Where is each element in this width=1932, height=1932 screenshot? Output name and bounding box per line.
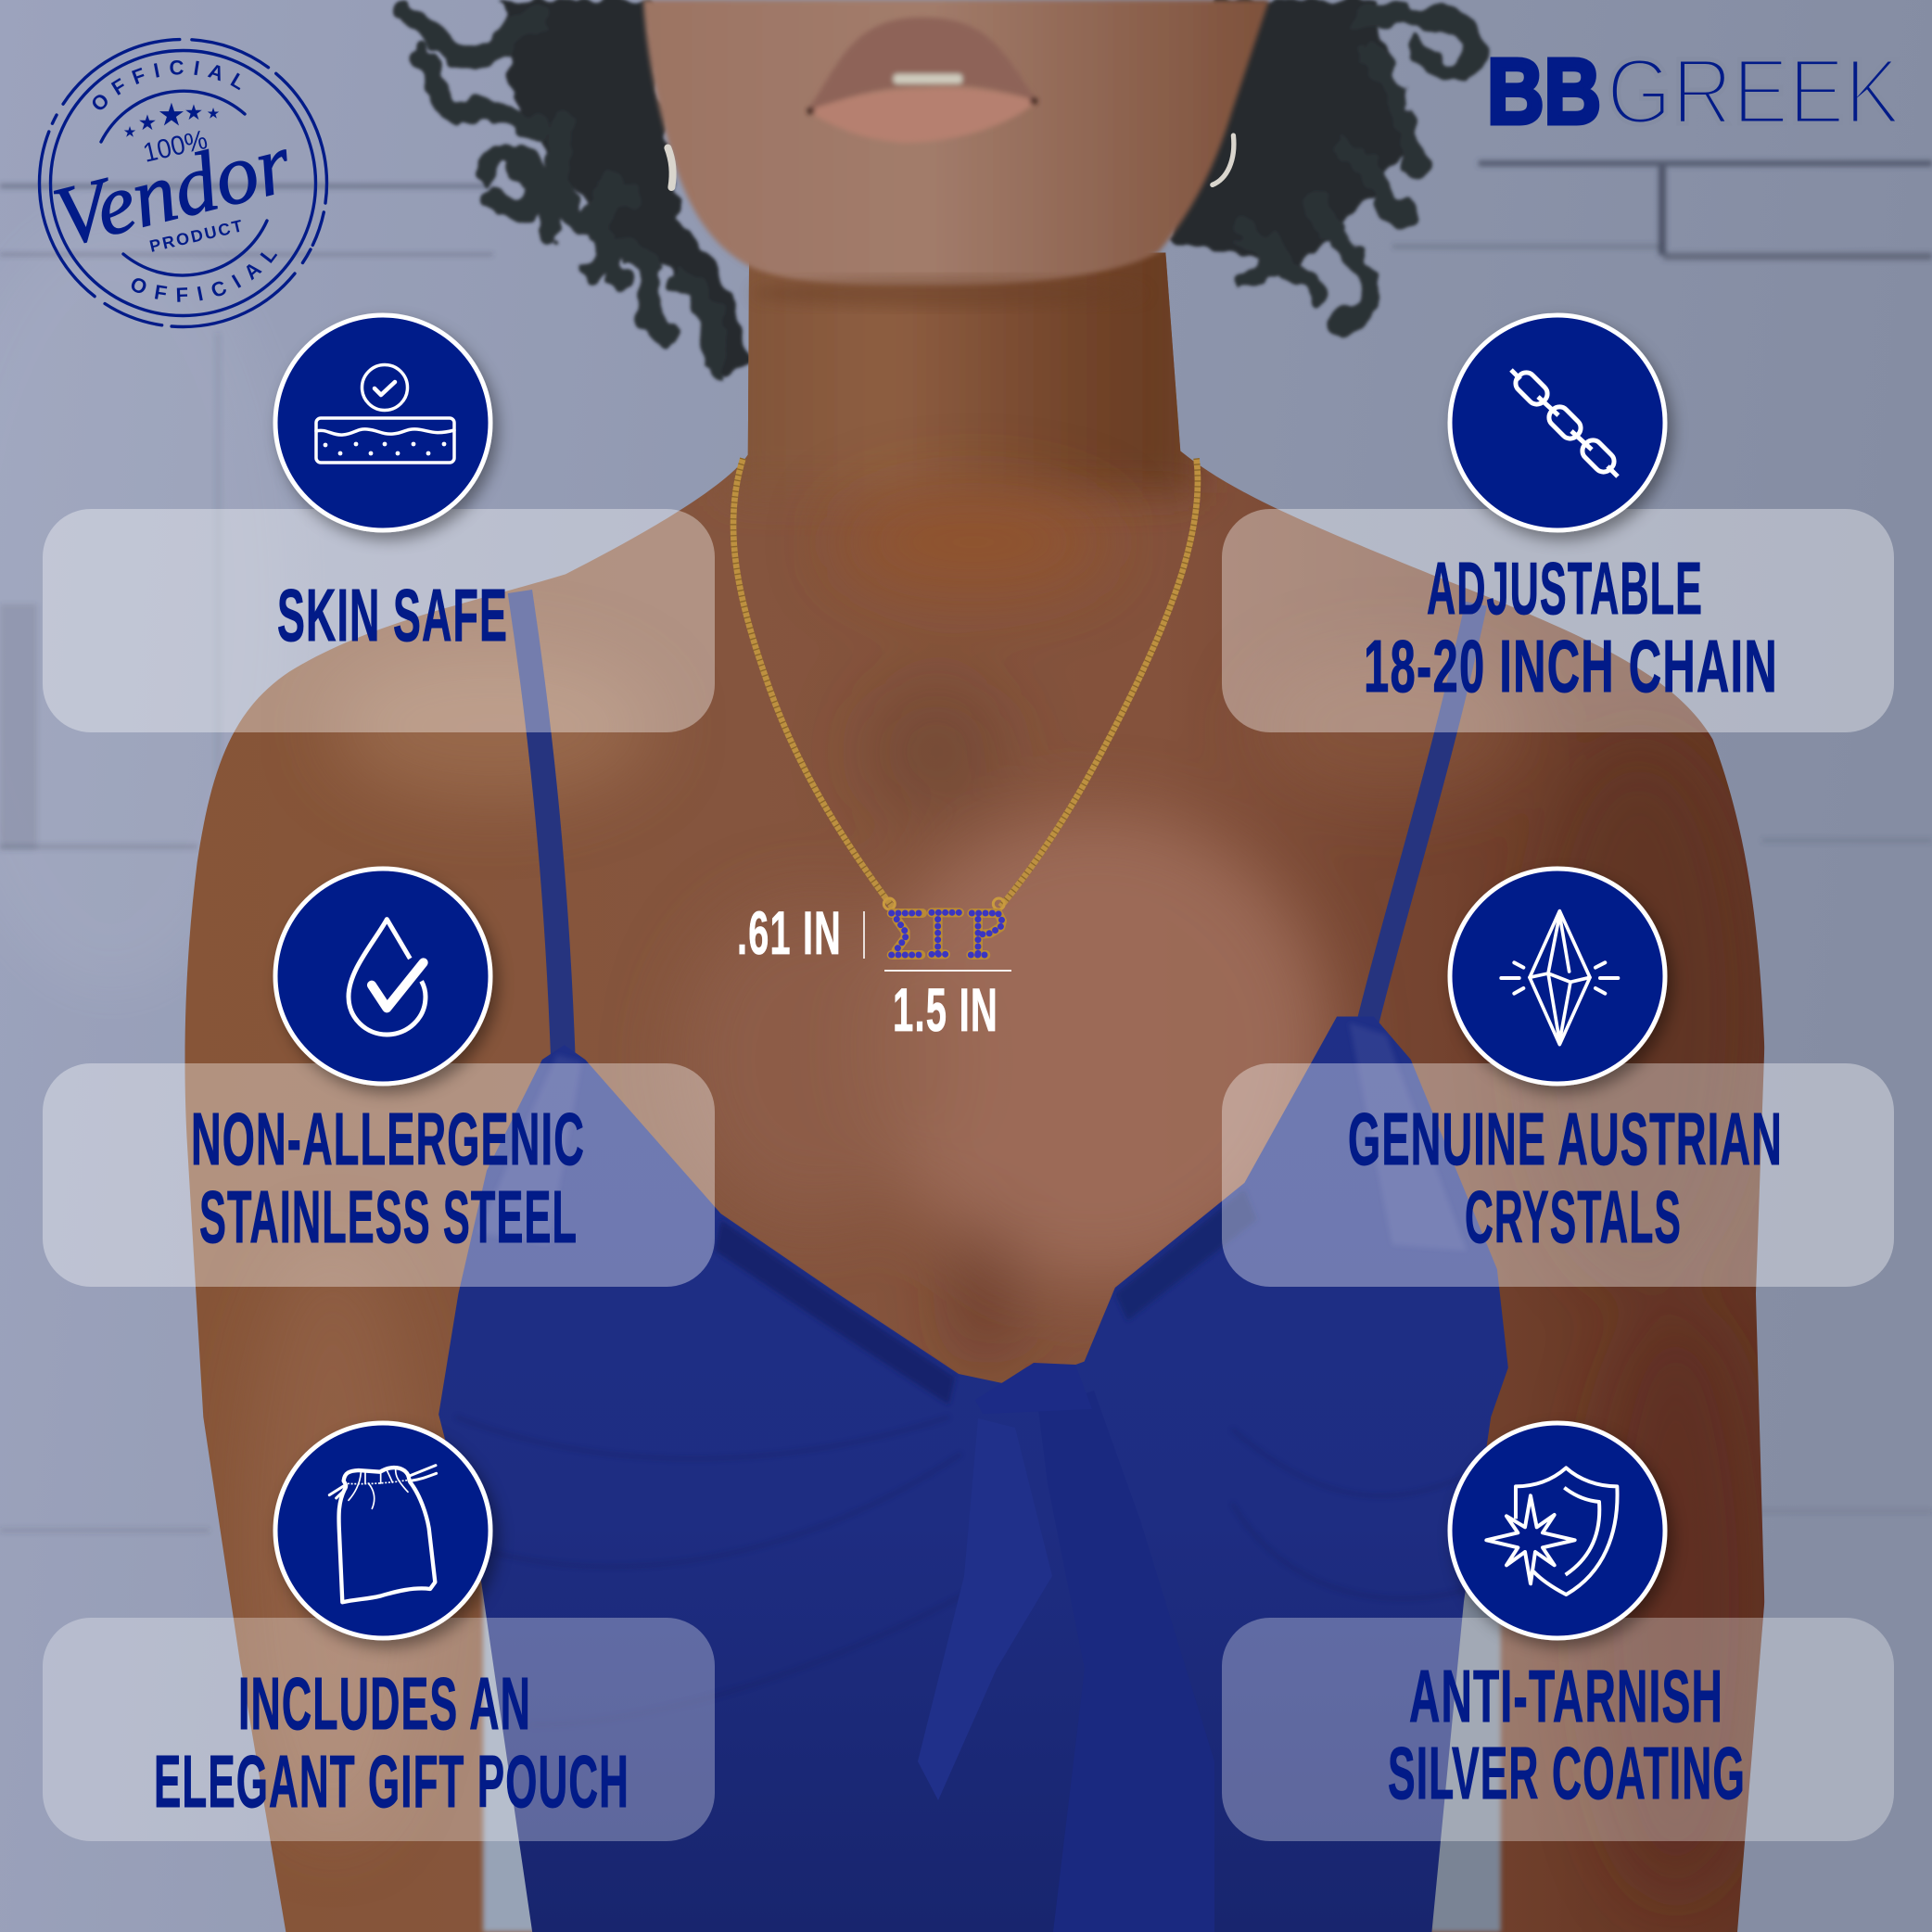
logo: official vendor stamp: 100%: [140, 125, 210, 169]
heading: genuine austrian crystals: [1348, 1098, 1783, 1258]
logo: official vendor stamp: ★: [208, 106, 220, 121]
chin shadow: [752, 278, 1146, 308]
logo: official vendor stamp: ★: [159, 100, 184, 131]
heading: skin safe: SKIN SAFE: [277, 574, 508, 656]
icon: skin safe layers: [275, 315, 490, 530]
logo: BB Greek wordmark: BB: [1487, 40, 1601, 144]
dimension: height label: .61 IN: [737, 898, 842, 967]
heading: anti-tarnish: [1388, 1655, 1746, 1814]
panel: anti-tarnish card: [1222, 1618, 1894, 1841]
dress tie: [918, 1363, 1214, 1932]
logo: official vendor stamp: Vendor: [44, 115, 300, 264]
necklace pendant with blue crystals: [883, 898, 1004, 955]
face: [643, 0, 1269, 286]
logo: BB Greek wordmark: GREEK: [1607, 40, 1900, 144]
heading: non-allergenic stainless steel: STAINLESS STEEL: [199, 1176, 578, 1258]
heading: gift pouch: [154, 1662, 629, 1823]
dimension: height divider: [863, 911, 865, 959]
heading: gift pouch: ELEGANT GIFT POUCH: [154, 1740, 629, 1823]
ruffled neckline: [478, 1023, 1467, 1405]
logo: official vendor stamp: OFFICIAL: [132, 252, 278, 302]
panel: austrian crystals card: [1222, 1063, 1894, 1287]
logo: official vendor stamp: ★: [139, 113, 156, 133]
heading: non-allergenic stainless steel: NON-ALLERGENIC: [191, 1098, 585, 1180]
heading: adjustable chain: [1364, 547, 1778, 707]
panel: skin safe card: [43, 509, 715, 732]
heading: genuine austrian crystals: CRYSTALS: [1465, 1176, 1682, 1258]
wall gaps beside dress: [483, 1565, 1501, 1932]
icon: water drop check: [275, 869, 490, 1084]
heading: adjustable chain: ADJUSTABLE: [1427, 547, 1703, 629]
dimension: width line: [884, 970, 1011, 972]
logo: official vendor stamp: ★: [124, 124, 136, 139]
hair: [403, 0, 1475, 371]
blue dress: [439, 1017, 1508, 1932]
panel: gift pouch card: [43, 1618, 715, 1841]
dimension: width label: 1.5 IN: [893, 975, 998, 1044]
logo: official vendor stamp: OFFICIAL: [93, 60, 241, 109]
dress straps: [520, 591, 1476, 1060]
icon: chain links: [1450, 315, 1665, 530]
panel: stainless steel card: [43, 1063, 715, 1287]
heading: non-allergenic stainless steel: [191, 1098, 585, 1258]
heading: gift pouch: INCLUDES AN: [238, 1662, 531, 1745]
dress folds: [456, 1417, 1485, 1725]
necklace chain: [733, 458, 1198, 907]
icon: crystal: [1450, 869, 1665, 1084]
logo: official vendor stamp: PRODUCT: [147, 216, 244, 256]
earrings: [667, 135, 1234, 187]
logo: BB Greek wordmark: [1487, 40, 1900, 144]
logo: official vendor stamp: ★: [185, 103, 202, 123]
panel: adjustable chain card: [1222, 509, 1894, 732]
skin: neck, shoulders and arms with soft shading: [123, 210, 1849, 1932]
icon: shield and sparkle: [1450, 1423, 1665, 1638]
lips: [807, 18, 1037, 143]
logo: official vendor stamp: [37, 37, 328, 328]
icon: gift pouch: [275, 1423, 490, 1638]
